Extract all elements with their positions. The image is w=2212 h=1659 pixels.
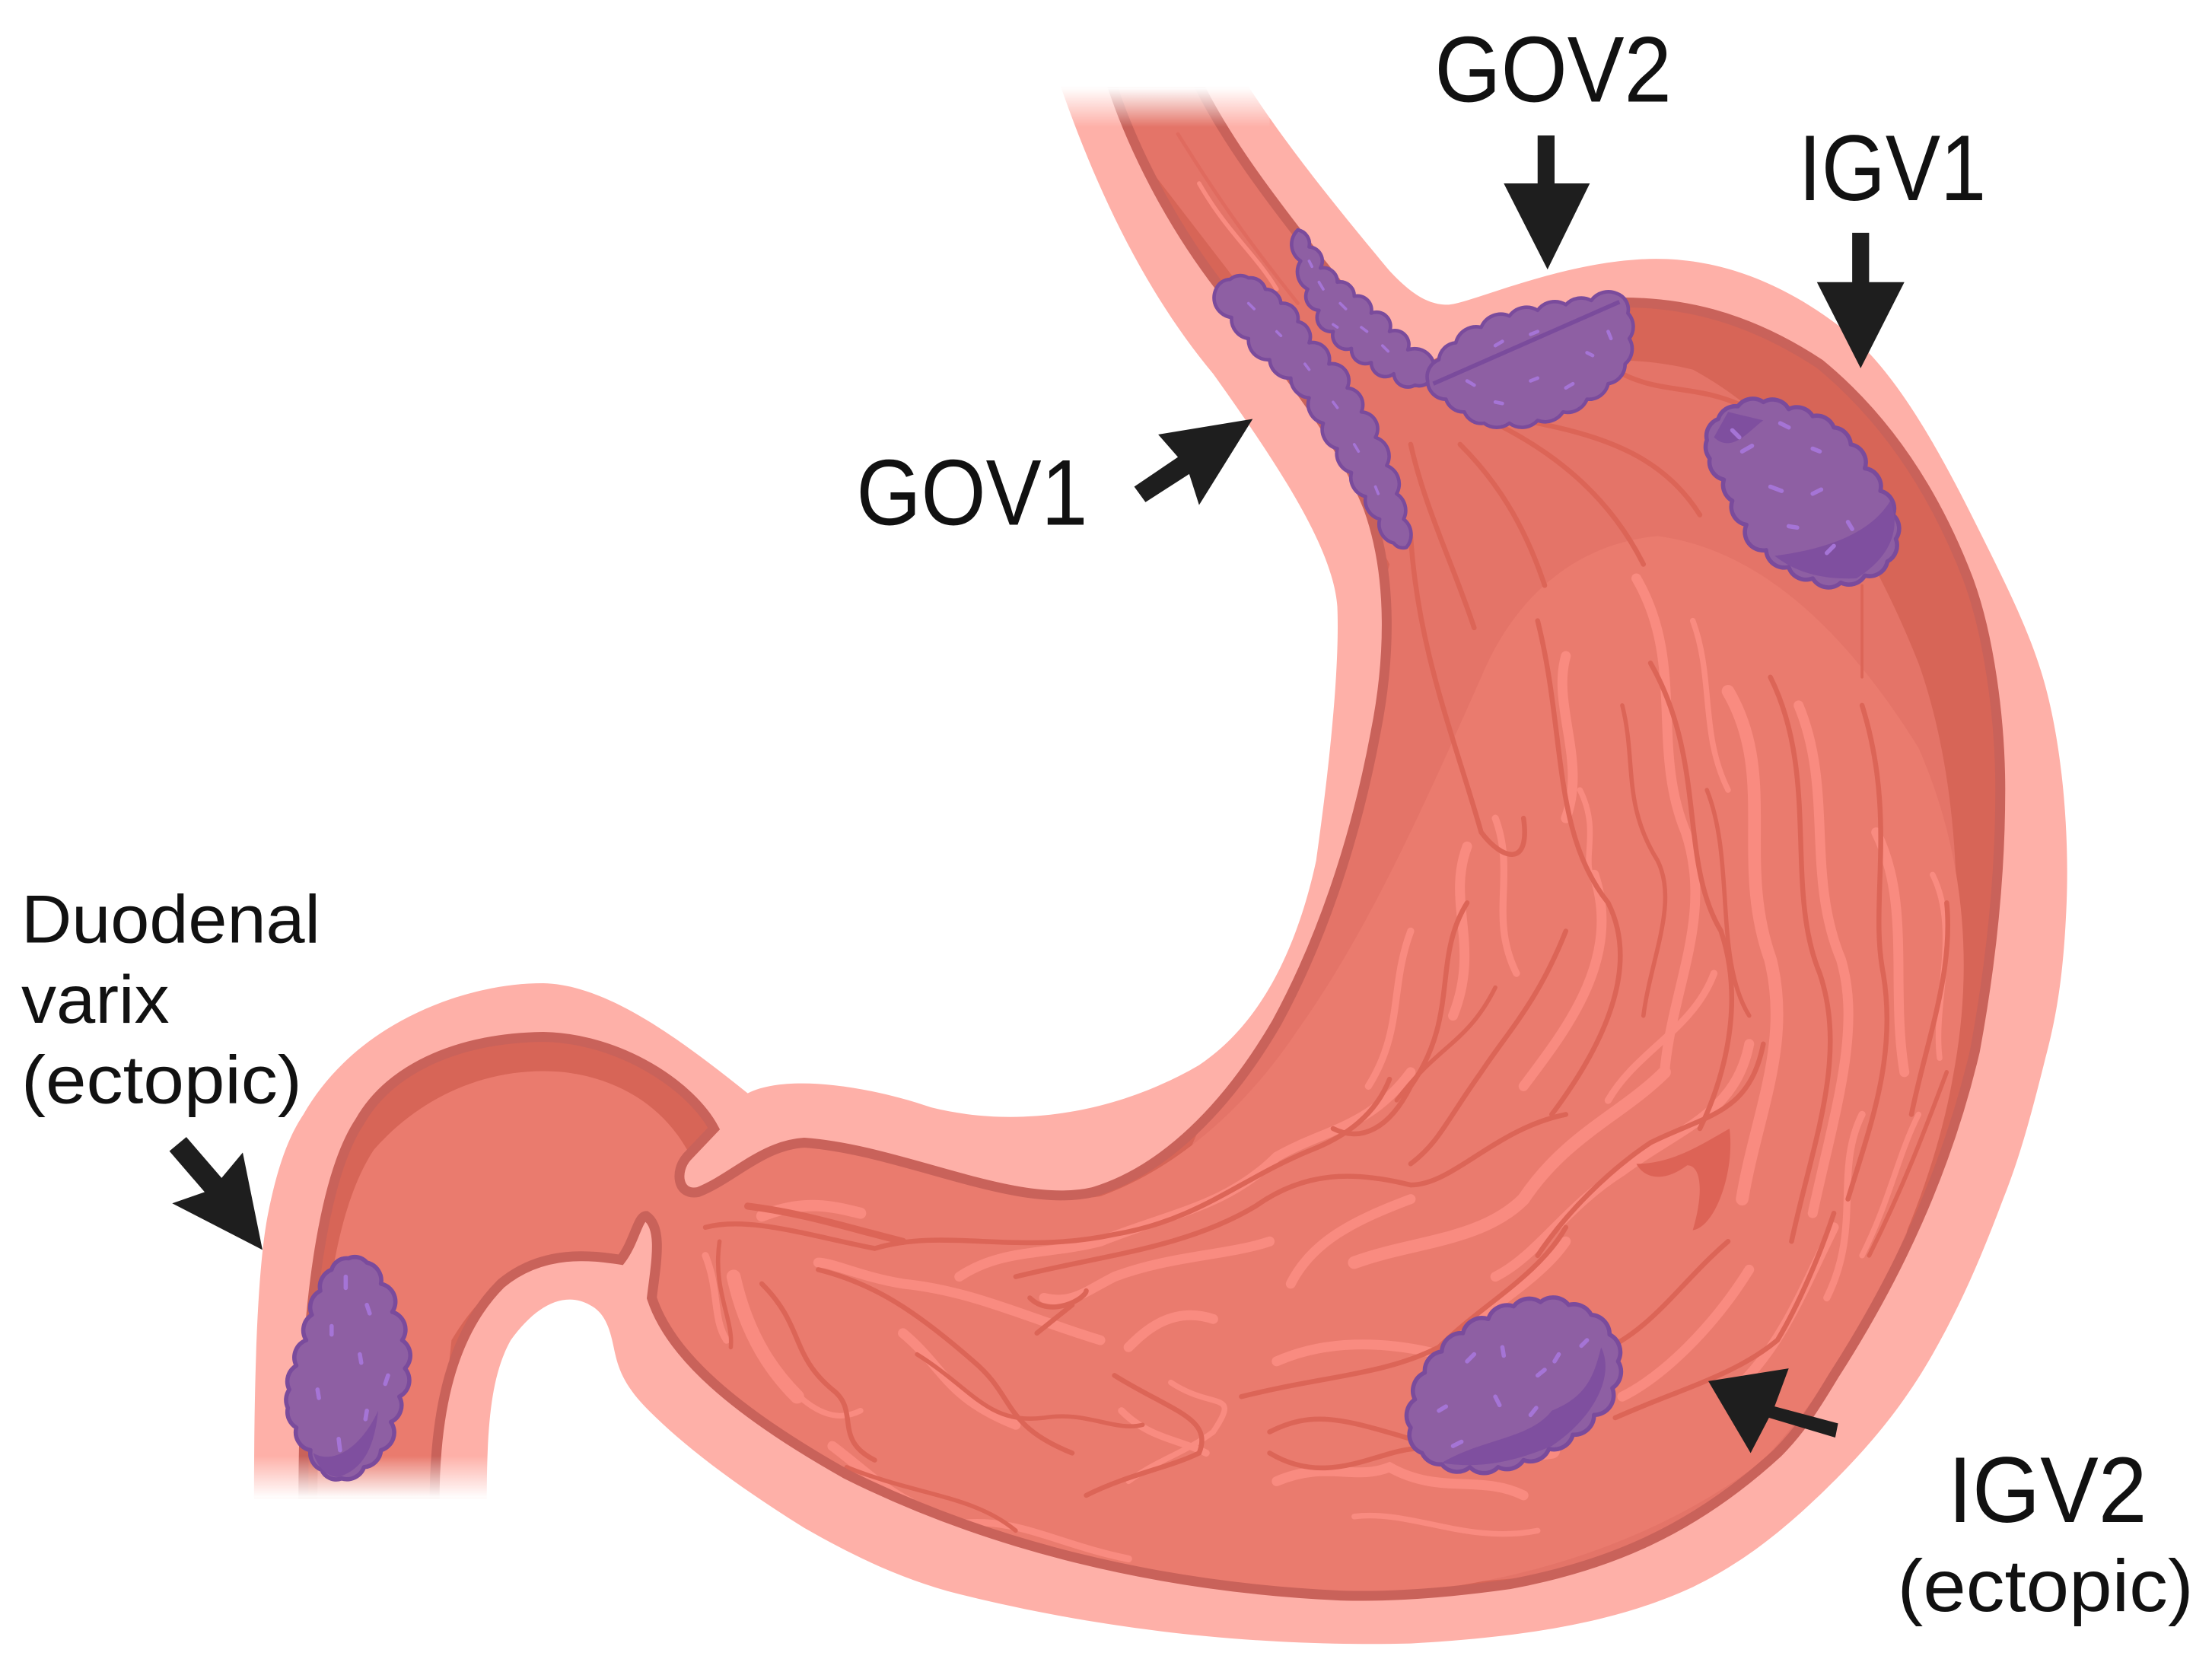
outer stomach wall (254, 71, 2067, 1644)
label: GOV2: GOV2 (1434, 17, 1672, 121)
varix: GOV1 strip upper (1291, 230, 1434, 387)
varix: IGV1 (1705, 399, 1899, 587)
stomach illustration (240, 56, 2067, 1651)
label: IGV2 (ectopic): (ectopic) (1897, 1546, 2194, 1627)
fundus and duodenal dark band (308, 178, 1995, 1586)
mucosal folds: dark (705, 134, 1948, 1530)
label: IGV2 (ectopic) (1897, 1438, 2194, 1627)
label: IGV1: IGV1 (1799, 116, 1986, 220)
varices (286, 230, 1899, 1479)
mid lining region (1125, 107, 1956, 1581)
lighter lumen region (318, 872, 1964, 1591)
label: IGV2 (ectopic): IGV2 (1948, 1438, 2147, 1542)
arrow: duodenal varix (170, 1137, 263, 1250)
arrow: IGV1 (1817, 233, 1905, 368)
varix: GOV1 strip lower (1214, 275, 1411, 548)
fold patch (1637, 1129, 1730, 1230)
arrow: GOV1 (1135, 419, 1252, 505)
label: Duodenal varix (ectopic): Duodenal (21, 880, 320, 957)
duodenum fade (240, 1456, 508, 1498)
label: Duodenal varix (ectopic): (ectopic) (21, 1042, 302, 1118)
varix: duodenal (286, 1257, 410, 1479)
label: GOV1: GOV1 (856, 441, 1087, 545)
arrow: IGV2 (1708, 1368, 1838, 1453)
inner stomach lining (308, 93, 1995, 1591)
label: Duodenal varix (ectopic) (21, 880, 320, 1118)
stomach lining outline (304, 71, 2000, 1596)
arrow: GOV2 (1504, 135, 1590, 269)
mucosal folds: light (705, 183, 1946, 1559)
label: Duodenal varix (ectopic): varix (21, 961, 170, 1037)
varix: IGV2 (1406, 1298, 1621, 1473)
varix: GOV2 (1427, 291, 1633, 428)
esophagus fade (1044, 88, 1270, 127)
